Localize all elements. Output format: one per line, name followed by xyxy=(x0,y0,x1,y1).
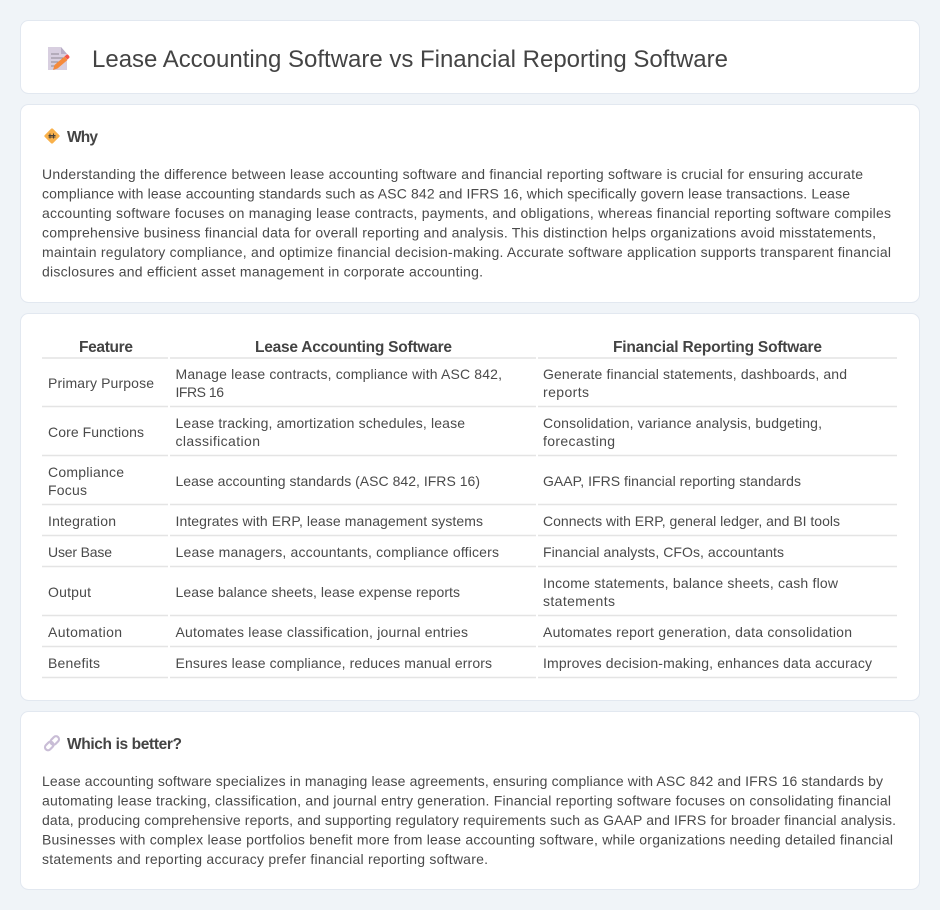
row: user base: Financial analysts, CFOs, accountants xyxy=(543,544,784,560)
heading: why: Why xyxy=(67,129,98,146)
row: user base: User Base xyxy=(48,544,112,560)
row: compliance focus xyxy=(48,464,801,498)
row: user base: Lease managers, accountants, compliance officers xyxy=(176,544,499,560)
row: compliance focus: GAAP, IFRS financial reporting standards xyxy=(543,473,801,489)
panel: comparison table xyxy=(20,314,920,700)
row: primary purpose: IFRS 16 xyxy=(176,384,224,400)
row: benefits xyxy=(48,655,872,671)
row: automation xyxy=(48,624,852,640)
row: core functions: Core Functions xyxy=(48,424,144,440)
panel: header xyxy=(20,20,920,94)
text block: why paragraph: accounting software focuses on managing lease contracts, payments, and obligations, whereas financial reporting software compiles xyxy=(42,205,891,221)
row: output: Income statements, balance sheets, cash flow xyxy=(543,575,839,591)
panel: why xyxy=(20,104,920,302)
row: primary purpose xyxy=(48,366,847,400)
row: core functions: forecasting xyxy=(543,433,615,449)
row: primary purpose: Manage lease contracts, compliance with ASC 842, xyxy=(176,366,502,382)
row: automation: Automation xyxy=(48,624,122,640)
row: integration xyxy=(48,513,840,529)
row: integration: Connects with ERP, general ledger, and BI tools xyxy=(543,513,840,529)
row: output: Lease balance sheets, lease expense reports xyxy=(176,584,460,600)
row: output: Output xyxy=(48,584,91,600)
table header row xyxy=(79,339,822,356)
text block: why paragraph xyxy=(42,166,891,280)
row: benefits: Ensures lease compliance, reduces manual errors xyxy=(176,655,492,671)
text block: which paragraph: automating lease tracking, classification, and journal entry generation. Financial reporting software focuses on consolidating financial xyxy=(42,792,891,808)
row: benefits: Improves decision-making, enhances data accuracy xyxy=(543,655,872,671)
row: automation: Automates report generation, data consolidation xyxy=(543,624,852,640)
row: compliance focus: Lease accounting standards (ASC 842, IFRS 16) xyxy=(176,473,480,489)
text block: why paragraph: disclosures and efficient asset management in corporate accounting. xyxy=(42,264,483,280)
text block: why paragraph: Understanding the difference between lease accounting software and financial reporting software is crucial for ensuring accurate xyxy=(42,166,863,182)
row: output: statements xyxy=(543,593,615,609)
row: compliance focus: Compliance xyxy=(48,464,124,480)
row: compliance focus: Focus xyxy=(48,482,87,498)
row: integration: Integration xyxy=(48,513,116,529)
row: user base xyxy=(48,544,784,560)
table header row: Financial Reporting Software xyxy=(613,339,822,356)
text block: why paragraph: compliance with lease accounting standards such as ASC 842 and IFRS 16, which specifically govern lease transactions. Lease xyxy=(42,186,850,202)
text block: which paragraph xyxy=(42,773,896,867)
row: output xyxy=(48,575,839,609)
icon: document with pencil xyxy=(48,47,70,70)
row: primary purpose: Primary Purpose xyxy=(48,375,154,391)
panel: which is better xyxy=(20,712,920,890)
row: benefits: Benefits xyxy=(48,655,100,671)
row: core functions: Lease tracking, amortization schedules, lease xyxy=(176,415,465,431)
text block: which paragraph: Lease accounting software specializes in managing lease agreements, ensuring compliance with ASC 842 and IFRS 16 standards by xyxy=(42,773,883,789)
row: core functions: Consolidation, variance analysis, budgeting, xyxy=(543,415,822,431)
icon: warning diamond xyxy=(44,128,60,144)
text block: which paragraph: data, producing comprehensive reports, and supporting regulatory requirements such as GAAP and IFRS for broader financial analysis. xyxy=(42,812,896,828)
row: core functions xyxy=(48,415,822,449)
row: integration: Integrates with ERP, lease management systems xyxy=(176,513,483,529)
icon: link xyxy=(44,735,60,751)
text block: which paragraph: Businesses with complex lease portfolios benefit more from lease accounting software, while organizations needing detailed financial xyxy=(42,832,893,848)
text block: which paragraph: statements and reporting accuracy prefer financial reporting software. xyxy=(42,851,488,867)
title: Lease Accounting Software vs Financial Reporting Software xyxy=(92,46,728,73)
text block: why paragraph: comprehensive business financial data for overall reporting and analysis. This distinction helps organizations avoid misstatements, xyxy=(42,224,876,240)
table header row: Lease Accounting Software xyxy=(255,339,452,356)
row: primary purpose: Generate financial statements, dashboards, and xyxy=(543,366,847,382)
row: automation: Automates lease classification, journal entries xyxy=(176,624,468,640)
table header row: Feature xyxy=(79,339,133,356)
text block: why paragraph: maintain regulatory compliance, and optimize financial decision-making. Accurate software application supports transparent financial xyxy=(42,244,891,260)
row: core functions: classification xyxy=(176,433,260,449)
row: primary purpose: reports xyxy=(543,384,589,400)
heading: which is better: Which is better? xyxy=(67,736,182,753)
